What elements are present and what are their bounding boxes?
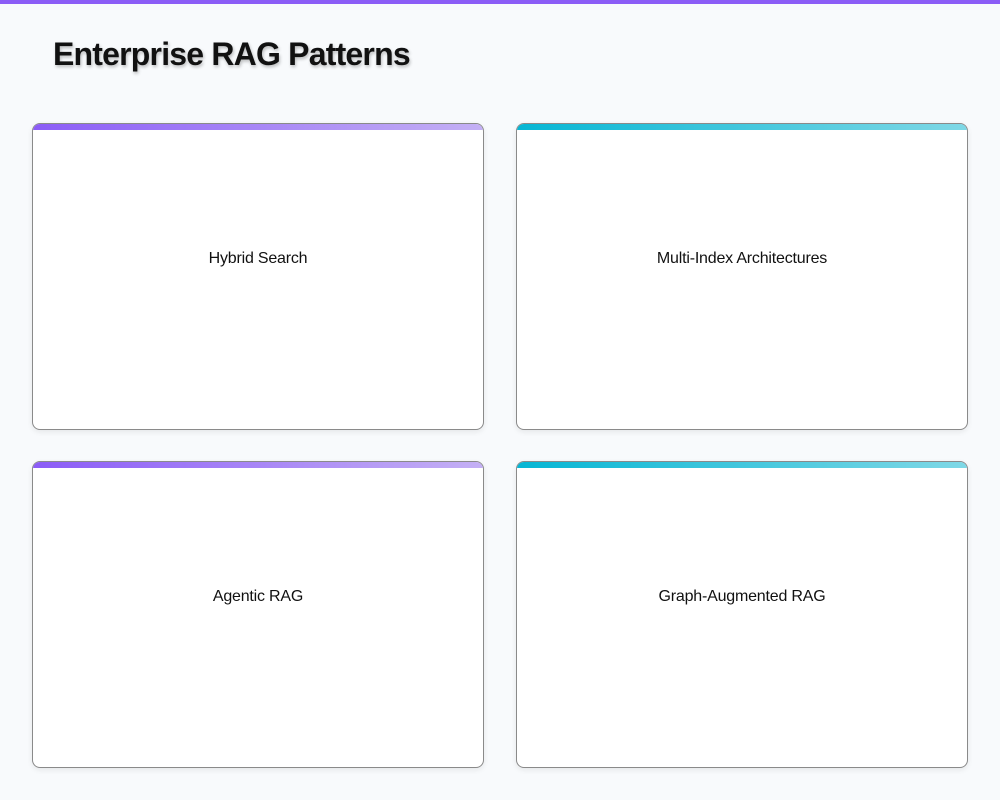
panel: agentic rag: Agentic RAG — [213, 588, 303, 605]
panel: multi-index architectures: Multi-Index Architectures — [657, 250, 827, 267]
title: Enterprise RAG Patterns — [53, 36, 410, 72]
panel: agentic rag — [32, 461, 484, 768]
panel: multi-index architectures — [516, 123, 968, 430]
panel: graph-augmented rag: Graph-Augmented RAG — [659, 588, 825, 605]
panel: hybrid search: Hybrid Search — [209, 250, 307, 267]
panel: graph-augmented rag — [516, 461, 968, 768]
panel: hybrid search — [32, 123, 484, 430]
